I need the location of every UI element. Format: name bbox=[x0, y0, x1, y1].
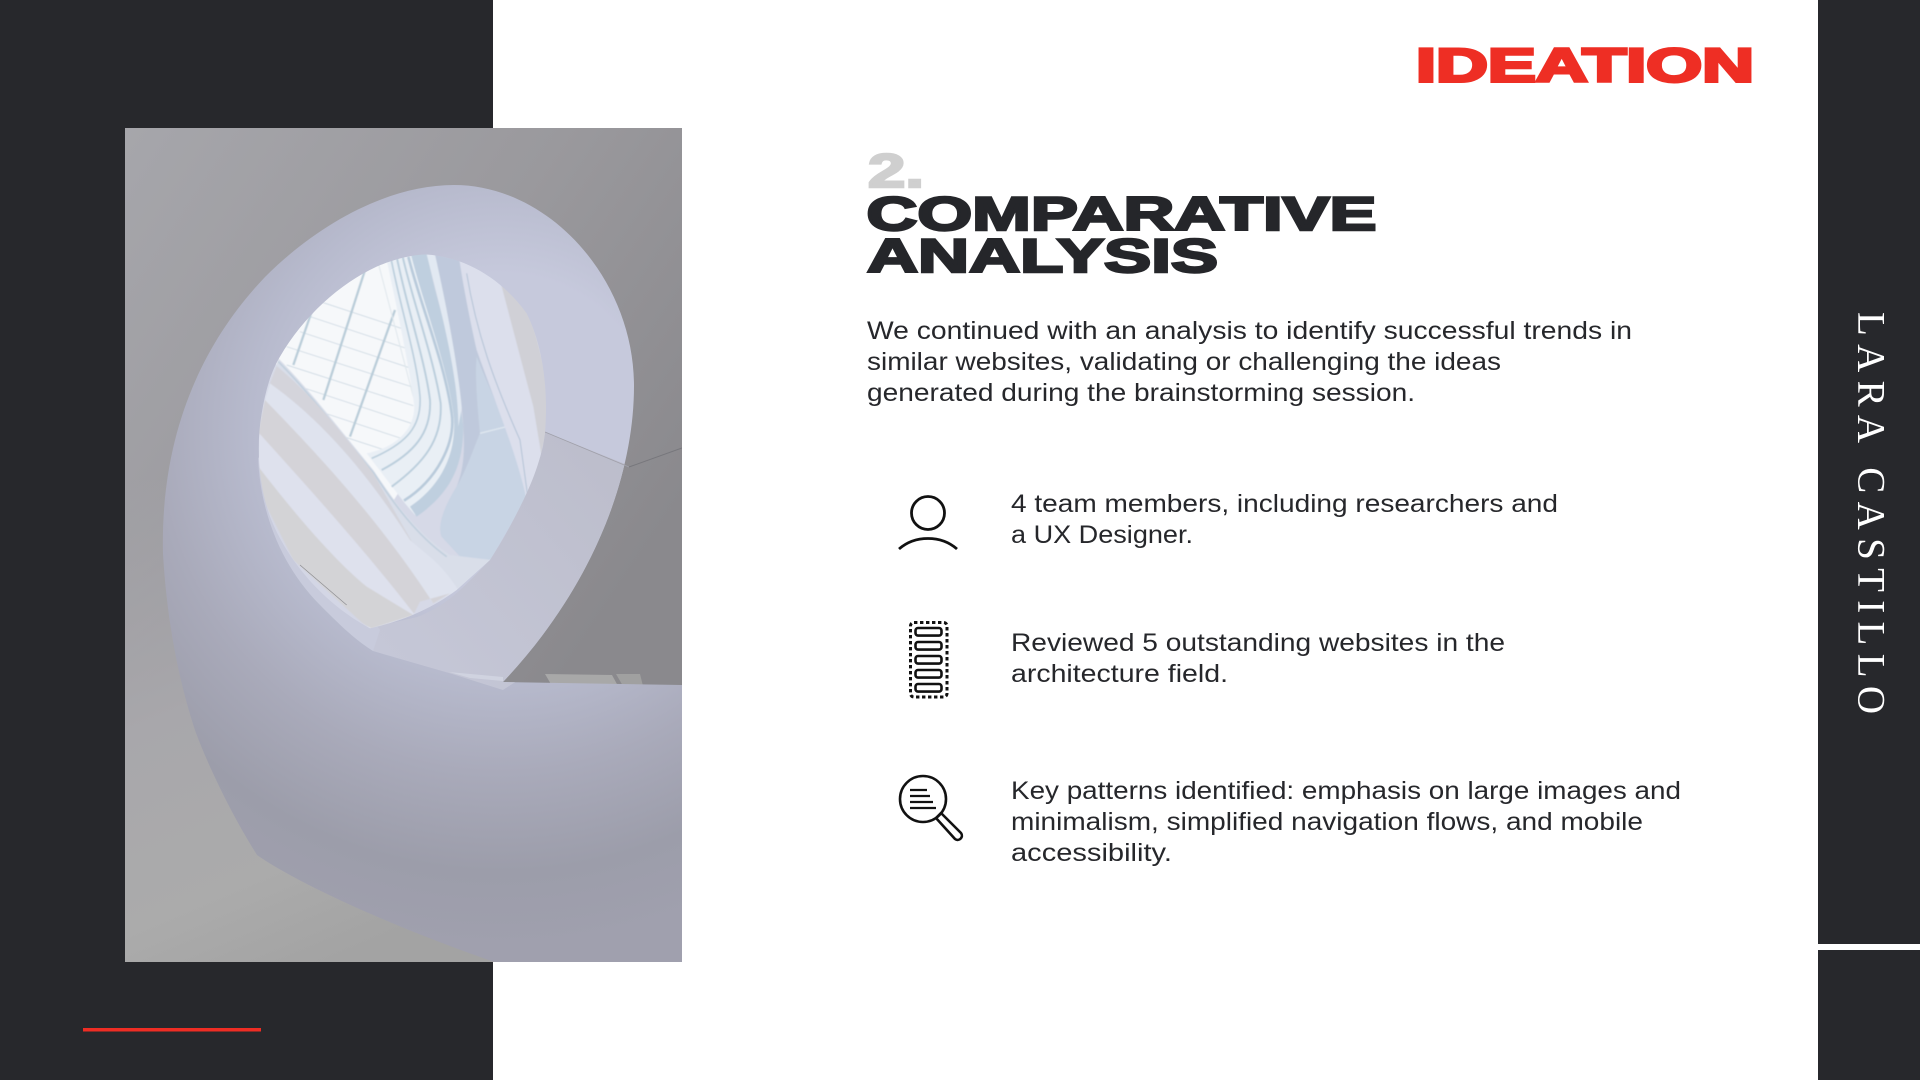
text block: intro paragraph: We continued with an analysis to identify successful trends in bbox=[867, 317, 1632, 345]
title: IDEATION: IDEATION bbox=[1416, 40, 1754, 92]
icon: magnifier over text bbox=[900, 776, 962, 840]
accent: red line bbox=[83, 1028, 261, 1032]
heading: comparative analysis bbox=[866, 188, 1376, 283]
text block: team members bbox=[1011, 490, 1558, 549]
icon: website wireframe bbox=[910, 622, 947, 697]
text block: websites reviewed: architecture field. bbox=[1011, 660, 1228, 688]
text block: intro paragraph: generated during the brainstorming session. bbox=[867, 379, 1415, 407]
text block: key patterns: minimalism, simplified navigation flows, and mobile bbox=[1011, 808, 1643, 836]
text block: team members: a UX Designer. bbox=[1011, 521, 1193, 549]
sidebar name: Lara Castillo: LARA CASTILLO bbox=[1850, 312, 1892, 714]
panel: left dark block bbox=[0, 0, 493, 1080]
text block: key patterns: Key patterns identified: emphasis on large images and bbox=[1011, 777, 1681, 805]
text block: key patterns bbox=[1011, 777, 1681, 867]
text block: websites reviewed bbox=[1011, 629, 1505, 688]
icon: person bbox=[899, 496, 957, 549]
text block: intro paragraph: similar websites, validating or challenging the ideas bbox=[867, 348, 1501, 376]
text block: team members: 4 team members, including researchers and bbox=[1011, 490, 1558, 518]
heading: comparative analysis: ANALYSIS bbox=[867, 230, 1218, 283]
photo: spiral staircase architecture bbox=[120, 120, 690, 970]
panel: right dark sidebar bbox=[1818, 0, 1920, 1080]
heading: section number: 2. bbox=[868, 145, 924, 198]
heading: comparative analysis: COMPARATIVE bbox=[866, 188, 1376, 241]
text block: websites reviewed: Reviewed 5 outstanding websites in the bbox=[1011, 629, 1505, 657]
text block: intro paragraph bbox=[867, 317, 1632, 407]
text block: key patterns: accessibility. bbox=[1011, 839, 1172, 867]
